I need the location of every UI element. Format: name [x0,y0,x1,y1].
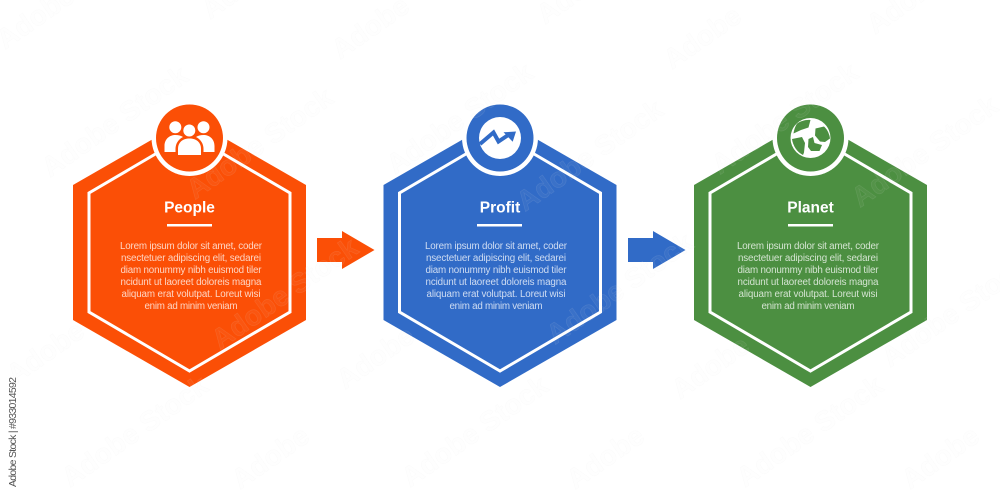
watermark: Adobe [658,0,747,75]
text block: planet: nsectetuer adipiscing elit, sedarei [738,253,878,264]
text block: profit: nsectetuer adipiscing elit, sedarei [426,253,566,264]
text block: people: diam nonummy nibh euismod tiler [120,265,262,276]
icon badge: people [152,100,228,176]
text block: planet: enim ad minim veniam [762,301,854,312]
text block: profit: aliquam erat volutpat. Loreut wisi [426,289,566,300]
stock credit: Adobe Stock | #933014592 [7,377,19,487]
watermark: Adobe Stock [181,81,339,205]
arrow: profit to planet [628,231,686,269]
text block: people [120,241,263,312]
underline: planet [788,224,833,226]
text block: people: Lorem ipsum dolor sit amet, coder [120,241,263,252]
hexagon: profit [384,118,616,387]
text block: people: enim ad minim veniam [144,301,238,312]
text block: planet [737,241,880,312]
watermark: Adobe Stock [706,56,864,180]
watermark: Adobe [666,330,755,405]
heading: profit: Profit [480,200,520,216]
text block: planet: Lorem ipsum dolor sit amet, coder [737,241,880,252]
hexagon outline: planet [710,134,911,371]
hexagon outline: profit [400,134,600,371]
text block: profit: ncidunt ut laoreet doloreis magna [426,277,567,288]
arrow: people to profit [317,231,374,269]
text block: people: aliquam erat volutpat. Loreut wisi [122,289,260,300]
watermark: Adobe Stock [541,226,699,350]
watermark: Adobe [1,315,90,390]
text block: planet: ncidunt ut laoreet doloreis magna [738,277,879,288]
text block: profit: enim ad minim veniam [450,301,542,312]
panel: profit [384,100,616,387]
hexagon outline: people [89,134,290,371]
heading: planet: Planet [787,200,834,216]
watermark: Adobe Stock [206,231,364,355]
heading: people: People [164,200,215,216]
icon badge: planet [772,100,848,176]
icon badge: profit [462,100,538,176]
underline: people [167,224,212,226]
hexagon: people [73,118,306,387]
text block: planet: aliquam erat volutpat. Loreut wisi [738,289,878,300]
underline: profit [477,224,522,226]
panel: people [73,100,306,387]
text block: profit: Lorem ipsum dolor sit amet, coder [425,241,568,252]
hexagon: planet [694,118,927,387]
text block: planet: diam nonummy nibh euismod tiler [738,265,879,276]
watermark: Adobe Stock [511,93,669,217]
text block: people: ncidunt ut laoreet doloreis magna [120,277,262,288]
watermark: Adobe Stock [396,369,554,490]
watermark: Adobe [331,320,420,395]
panel: planet [694,100,927,387]
text block: profit [425,241,568,312]
text block: people: nsectetuer adipiscing elit, sedarei [121,253,261,264]
text block: profit: diam nonummy nibh euismod tiler [426,265,567,276]
watermark: Adobe Stock [381,56,539,180]
watermark: Adobe Stock [36,59,194,183]
watermark: Adobe Stock [731,369,889,490]
watermark: Adobe Stock [846,89,1000,213]
watermark: Adobe Stock [56,369,214,490]
